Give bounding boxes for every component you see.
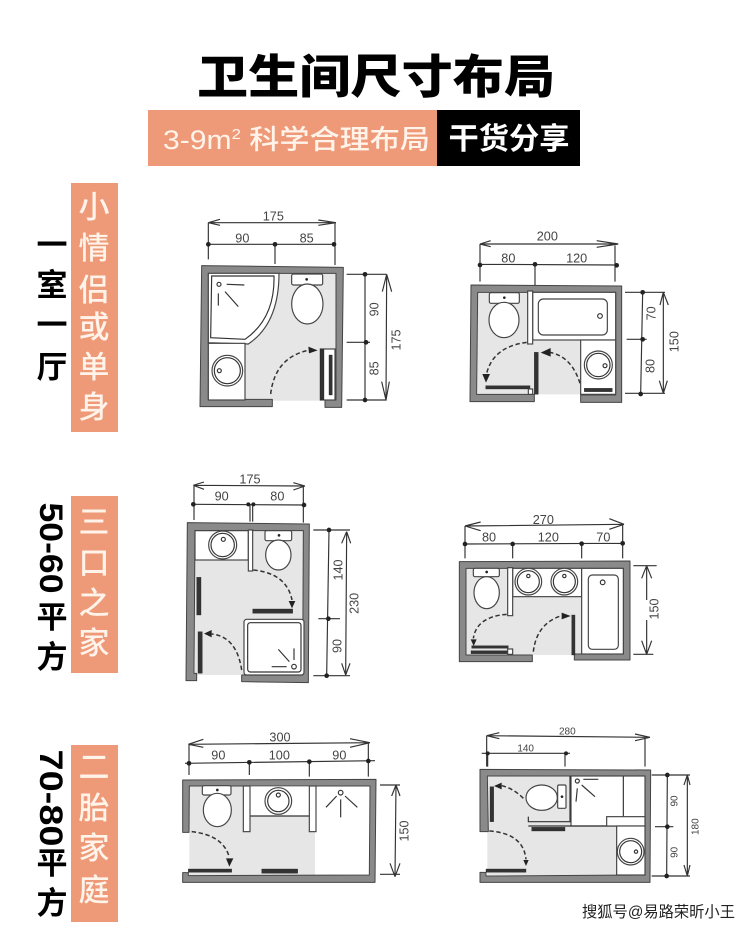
sink (581, 340, 616, 394)
dimensions: 120 (538, 531, 559, 545)
row 1 tag: 小情侣或单身: 身 (78, 390, 110, 425)
double sink (513, 568, 582, 597)
row 3 tag: 二胎家庭: 庭 (78, 873, 110, 908)
row 2 tag: 三口之家: 三 (78, 505, 110, 540)
dimensions: 90 (368, 302, 382, 316)
dimensions: 80 (644, 359, 658, 373)
toilet (202, 786, 231, 827)
dimensions (478, 230, 682, 396)
floor and walls (470, 285, 622, 402)
floor and walls (186, 523, 309, 683)
dimensions: 175 (263, 210, 284, 224)
dimensions: 85 (368, 361, 382, 375)
dimensions: 175 (390, 329, 404, 351)
sink (208, 343, 245, 400)
row 1 tag: 小情侣或单身 (71, 183, 118, 432)
row 2 tag: 三口之家: 口 (78, 546, 110, 581)
row 3 label: 70-80平方: 平 (36, 846, 68, 881)
toilet (489, 293, 519, 338)
dimensions: 280 (559, 727, 576, 738)
dimensions (206, 210, 404, 402)
partition wall (528, 291, 533, 344)
sink (250, 786, 309, 816)
row 3 label: 70-80平方: 70-80 (33, 750, 69, 846)
floor plan 4: 270 x 150 (459, 513, 662, 662)
door (271, 347, 335, 400)
dimensions (191, 472, 362, 678)
row 2 label: 50-60平方: 方 (36, 640, 68, 675)
dimensions: 90 (331, 639, 345, 653)
dimensions: 90 (215, 490, 229, 504)
floor plan 6: 280 x 180 (480, 727, 701, 882)
toilet (473, 568, 499, 609)
row 1 tag: 小情侣或单身: 情 (78, 231, 110, 266)
row 1 label: 一室一厅: 厅 (36, 350, 68, 385)
floor plan 2: 200 x 150 (470, 230, 682, 402)
partition walls (243, 786, 316, 832)
dimensions: 90 (669, 795, 680, 807)
toilet (526, 776, 570, 822)
dimensions: 90 (332, 748, 346, 762)
floor plan 5: 300 x 150 (183, 731, 412, 882)
row 1 label: 一室一厅: 一 (36, 308, 68, 343)
dimensions: 70 (645, 306, 659, 320)
row 2 label: 50-60平方: 50-60 (33, 502, 69, 594)
partition wall (508, 568, 513, 616)
floor plan 1: 175 x 175 (200, 210, 404, 407)
banner: 科学合理布局 (241, 125, 430, 155)
dimensions (185, 731, 412, 877)
banner: 干货分享 (448, 123, 570, 156)
toilet (292, 274, 323, 324)
floor and walls (459, 561, 630, 662)
floor and walls (183, 779, 376, 882)
sink (195, 531, 248, 560)
dimensions: 140 (517, 743, 534, 754)
row 1 tag: 小情侣或单身: 侣 (78, 273, 110, 308)
dimensions: 300 (269, 731, 291, 745)
row 2 label: 50-60平方 (33, 502, 69, 675)
dimensions: 230 (348, 593, 362, 614)
row 1 tag: 小情侣或单身: 单 (78, 350, 110, 385)
banner: 3-9m (163, 125, 225, 155)
toilet (265, 531, 292, 570)
banner (148, 110, 580, 166)
dimensions: 270 (533, 513, 554, 527)
doors (471, 613, 575, 655)
row 2 tag: 三口之家: 之 (78, 586, 110, 621)
row 2 tag: 三口之家 (71, 496, 118, 673)
doors (482, 342, 612, 394)
dimensions (463, 513, 662, 654)
doors (188, 832, 298, 873)
row 3 tag: 二胎家庭: 胎 (78, 791, 110, 826)
shower head (326, 790, 357, 817)
row 2 tag: 三口之家: 家 (78, 626, 110, 661)
dimensions: 100 (269, 748, 290, 762)
dimensions: 180 (690, 818, 701, 835)
row 1 label: 一室一厅 (36, 228, 68, 385)
dimensions: 150 (398, 820, 412, 842)
row 1 label: 一室一厅: 一 (36, 228, 68, 263)
dimensions: 140 (332, 559, 346, 581)
title: 卫生间尺寸布局 (197, 51, 555, 103)
row 2 label: 50-60平方: 平 (36, 600, 68, 635)
dimensions (482, 727, 701, 878)
bathtub (582, 568, 623, 654)
shower (244, 619, 304, 675)
row 3 tag: 二胎家庭: 二 (78, 750, 110, 785)
row 1 tag: 小情侣或单身: 小 (78, 190, 110, 225)
dimensions: 120 (566, 251, 587, 265)
floor and walls (200, 266, 343, 407)
row 1 label: 一室一厅: 室 (36, 268, 68, 303)
banner: 2 (232, 126, 241, 143)
bathtub (533, 292, 616, 340)
dimensions: 150 (648, 598, 662, 620)
doors (197, 570, 295, 673)
doors (486, 783, 565, 872)
dimensions: 80 (270, 490, 284, 504)
dimensions: 80 (482, 531, 496, 545)
dimensions: 90 (669, 846, 680, 858)
shower (528, 776, 645, 826)
row 3 tag: 二胎家庭 (71, 745, 118, 922)
floor and walls (480, 769, 651, 882)
dimensions: 90 (211, 748, 225, 762)
row 3 tag: 二胎家庭: 家 (78, 831, 110, 866)
watermark: 搜狐号@易路荣昕小王 (582, 903, 735, 921)
shower (208, 273, 279, 344)
dimensions: 200 (537, 230, 558, 244)
floor plan 3: 175 x 230 (186, 472, 362, 683)
row 1 tag: 小情侣或单身: 或 (78, 310, 110, 345)
sink (617, 826, 645, 875)
dimensions: 80 (501, 251, 515, 265)
partition wall (248, 530, 253, 571)
dimensions: 150 (668, 331, 682, 352)
dimensions: 90 (235, 231, 249, 245)
dimensions: 70 (596, 531, 610, 545)
row 3 label: 70-80平方 (33, 750, 69, 921)
dimensions: 85 (300, 231, 314, 245)
dimensions: 175 (239, 472, 261, 486)
row 3 label: 70-80平方: 方 (36, 886, 68, 921)
